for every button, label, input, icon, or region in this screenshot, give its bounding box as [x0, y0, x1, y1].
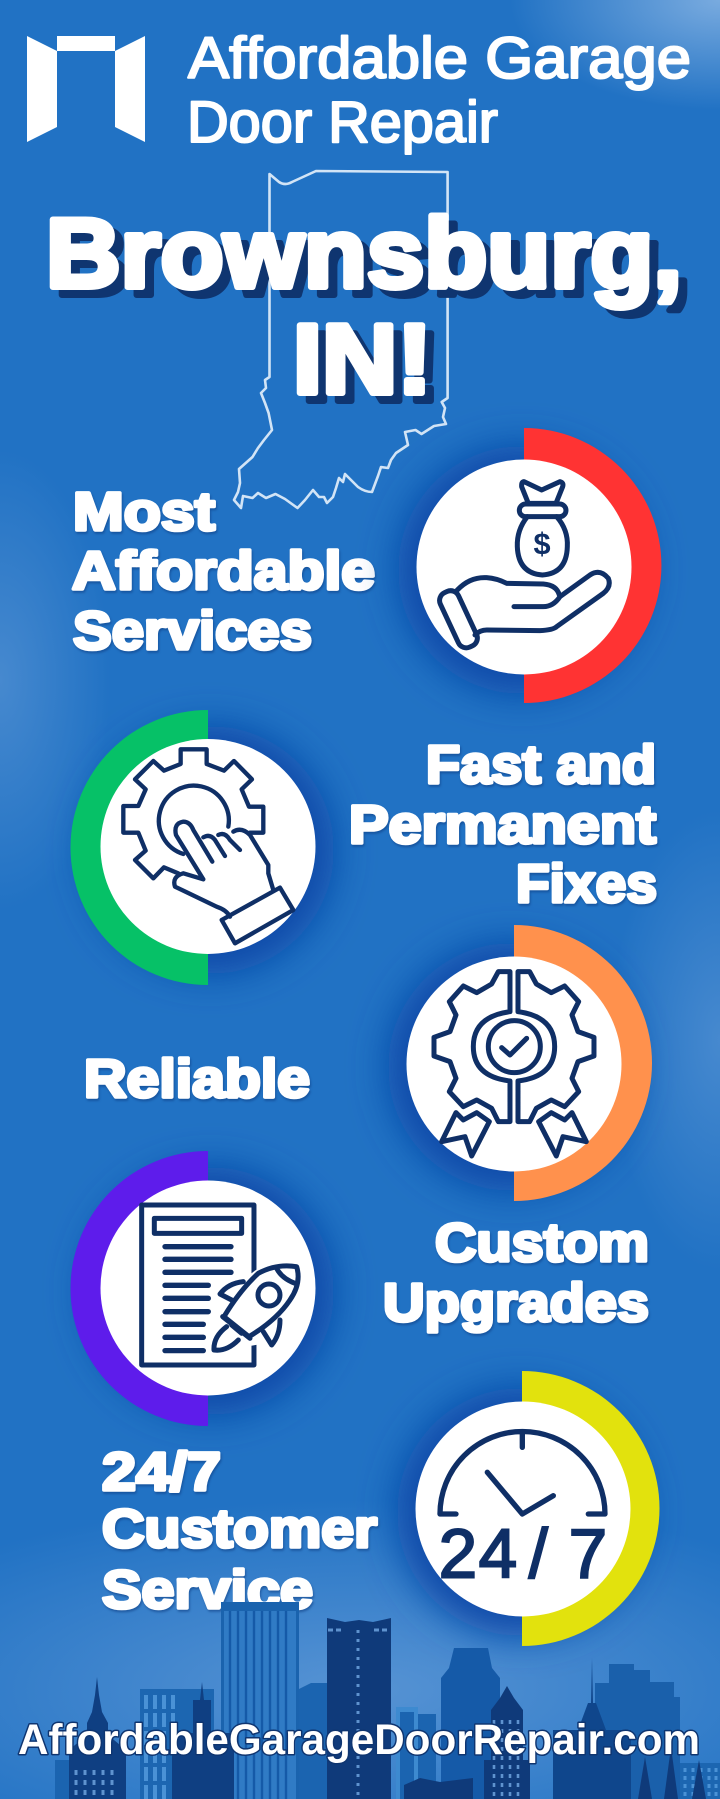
- heading: Custom Upgrades: [383, 1213, 649, 1333]
- ring card: 24/7 clock icon: [397, 1371, 660, 1646]
- heading: 24/7 Customer Service: Customer: [102, 1499, 377, 1559]
- logo wordmark: Affordable Garage: [188, 26, 691, 91]
- logo mark: [27, 36, 145, 142]
- city skyline: [55, 1602, 720, 1799]
- heading: Custom Upgrades: Custom: [435, 1213, 649, 1273]
- title: Brownsburg, IN!: Brownsburg,: [46, 198, 682, 308]
- heading: Most Affordable Services: Services: [73, 601, 312, 661]
- icon: hand pressing gear: [123, 749, 293, 943]
- heading: Custom Upgrades: Upgrades: [383, 1273, 649, 1333]
- ring card: money icon: [398, 428, 661, 703]
- icon: clock with 24/7: [439, 1431, 607, 1592]
- heading: Fast and Permanent Fixes: Fast and: [426, 735, 656, 795]
- heading: Fast and Permanent Fixes: [349, 735, 657, 914]
- heading: Reliable: Reliable: [84, 1049, 310, 1109]
- icon: hand holding money bag: [437, 482, 609, 651]
- icon: document with rocket: [142, 1205, 299, 1365]
- icon: hand holding money bag: $: [533, 527, 551, 561]
- heading: Fast and Permanent Fixes: Fixes: [516, 854, 657, 914]
- logo wordmark: [187, 26, 691, 155]
- heading: Most Affordable Services: Most: [73, 482, 215, 542]
- Indiana state outline: [234, 171, 448, 508]
- icon: gear badge with check: [434, 972, 594, 1156]
- title: Brownsburg, IN!: [46, 198, 682, 414]
- heading: 24/7 Customer Service: 24/7: [102, 1442, 221, 1502]
- heading: Fast and Permanent Fixes: Permanent: [349, 795, 656, 855]
- heading: 24/7 Customer Service: Service: [102, 1560, 313, 1620]
- heading: 24/7 Customer Service: [102, 1442, 377, 1620]
- logo wordmark: Door Repair: [187, 90, 498, 155]
- icon: clock with 24/7: 24/7: [439, 1514, 607, 1592]
- heading: Most Affordable Services: Affordable: [72, 541, 375, 601]
- ring card: quality badge icon: [388, 925, 652, 1201]
- ring card: gear touch icon: [70, 710, 334, 985]
- ring card: document and rocket icon: [70, 1151, 334, 1426]
- heading: Most Affordable Services: [72, 482, 375, 661]
- title: Brownsburg, IN!: IN!: [293, 304, 432, 414]
- footer website URL: AffordableGarageDoorRepair.com: [18, 1716, 700, 1764]
